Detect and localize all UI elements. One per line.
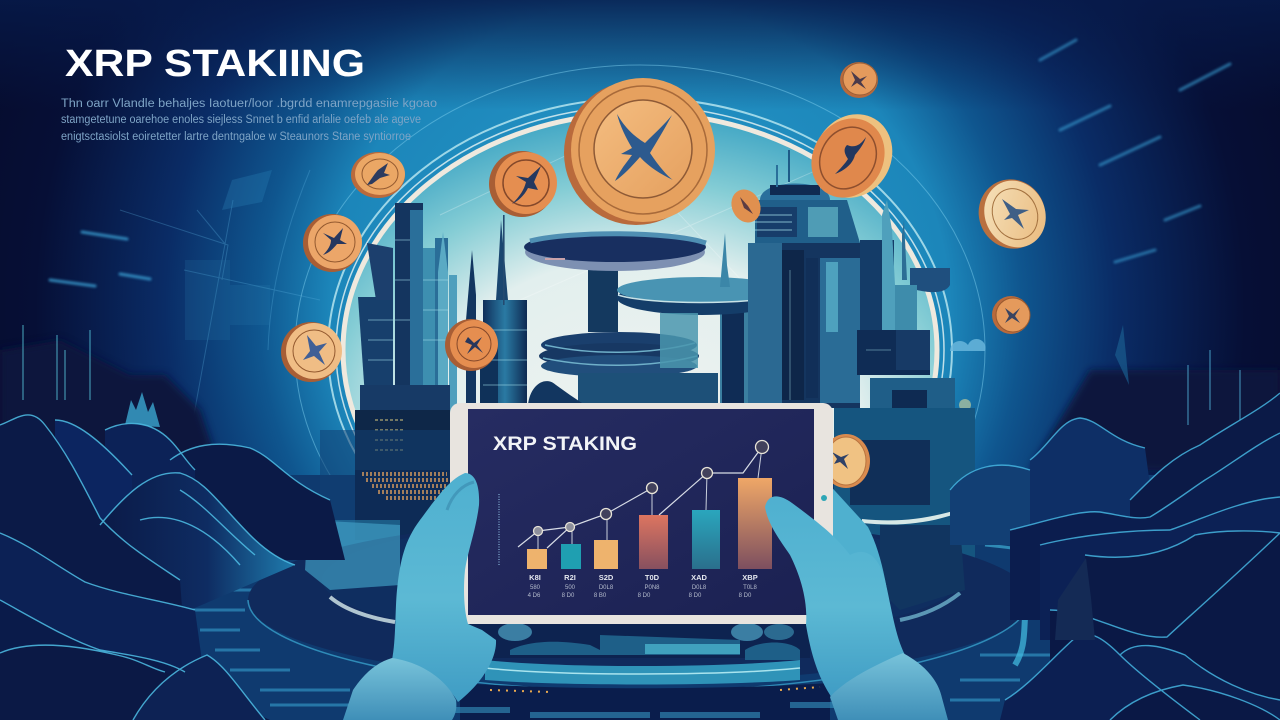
coin: lower left — [281, 322, 342, 382]
description text — [61, 98, 437, 143]
tablet — [450, 403, 833, 624]
bar chart: P0N8 — [644, 585, 660, 591]
bar chart — [499, 440, 772, 599]
strip under tablet — [455, 622, 835, 720]
tablet body — [450, 403, 833, 624]
dark horizon spires left — [0, 325, 220, 470]
dark horizon spires right — [1030, 325, 1280, 470]
coin: front of left towers — [445, 319, 498, 371]
coin: upper left small — [351, 152, 405, 198]
title: XRP STAKIING — [65, 43, 365, 85]
right tower cluster — [720, 150, 986, 430]
river circuit channels — [175, 545, 1130, 705]
bar chart: T0D — [645, 573, 660, 582]
bar chart: 8 D0 — [562, 593, 575, 599]
right hand — [765, 496, 948, 720]
tablet heading: XRP STAKING — [493, 433, 637, 455]
tablet screen — [468, 409, 814, 615]
bar chart: 8 D0 — [638, 593, 651, 599]
left hand — [343, 473, 496, 720]
bar chart: S2D — [599, 573, 614, 582]
mountains right — [950, 393, 1280, 720]
bar chart: XBP — [742, 573, 758, 582]
coin: large centre — [564, 78, 715, 225]
description text: stamgetetune oarehoe enoles siejless Snnet b enfid arlalie oefeb ale ageve — [61, 114, 421, 126]
coin: upper right large — [797, 100, 907, 212]
lower city base — [0, 408, 1280, 720]
description text: enigtsctasiolst eoiretetter lartre dentngaloe w Steaunors Stane syntiorroe — [61, 131, 411, 143]
bar chart: D0L8 — [692, 585, 707, 591]
coin: mid left — [303, 214, 362, 272]
bar chart: 500 — [565, 585, 576, 591]
bar chart: 580 — [530, 585, 541, 591]
bar chart: K8I — [529, 573, 541, 582]
dome outer rings — [295, 65, 985, 635]
coin: upper left large — [489, 151, 557, 217]
bar chart: XAD — [691, 573, 707, 582]
bar chart: R2I — [564, 573, 576, 582]
fingers behind tablet — [825, 480, 890, 610]
dome interior — [343, 113, 937, 587]
coin: right small — [992, 296, 1030, 334]
bar chart: D0L8 — [599, 585, 614, 591]
coin: upper right small — [840, 62, 878, 98]
bar chart: 8 D0 — [739, 593, 752, 599]
coin: far right cream — [967, 168, 1057, 260]
tablet camera dot — [821, 495, 827, 501]
left cuff — [343, 658, 456, 720]
description text: Thn oarr Vlandle behaljes Iaotuer/loor .bgrdd enamrepgasiie kgoao — [61, 98, 437, 110]
bar chart: T0L8 — [743, 585, 757, 591]
bar chart: 8 B0 — [594, 593, 607, 599]
left tower cluster — [355, 203, 527, 472]
coin: behind tablet — [822, 434, 870, 488]
centre disc towers — [524, 232, 790, 405]
bar chart: 4 D6 — [528, 593, 541, 599]
city base platform — [248, 518, 1032, 692]
left thumb nail shadow — [447, 482, 474, 510]
bar chart: 8 D0 — [689, 593, 702, 599]
mountains left — [0, 415, 345, 720]
right cuff — [830, 653, 948, 720]
coin: behind tower — [726, 185, 766, 227]
